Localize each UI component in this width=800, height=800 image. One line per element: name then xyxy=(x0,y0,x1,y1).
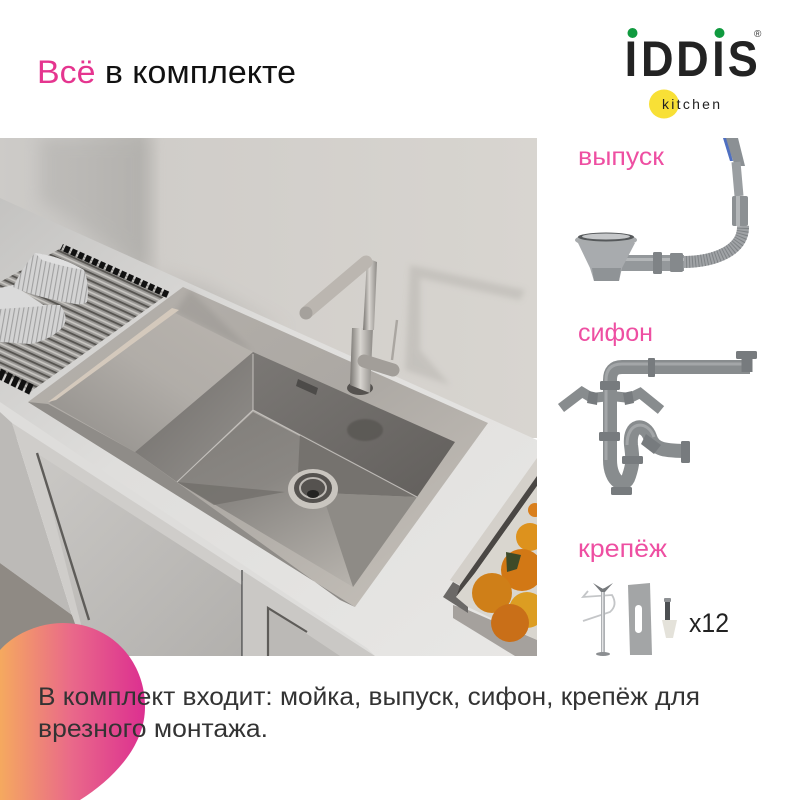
gradient blob xyxy=(0,623,145,800)
faucet reflection on top xyxy=(178,294,238,342)
basin back left wall xyxy=(135,352,253,482)
counter front edge xyxy=(0,402,375,656)
drainboard xyxy=(49,313,253,452)
floor xyxy=(0,563,75,650)
rack ties front xyxy=(0,368,34,395)
persimmons xyxy=(472,503,537,642)
icon: drain outlet xyxy=(575,138,748,281)
sink top xyxy=(28,287,488,607)
photo: kitchen sink xyxy=(0,138,545,656)
title: Всё в комплекте xyxy=(37,54,296,90)
strainer body xyxy=(578,243,635,281)
heading: сифон: сифон xyxy=(578,319,653,347)
basin floor facets xyxy=(298,433,417,497)
kitchen wordmark: kitchen xyxy=(662,96,720,112)
basin back right wall xyxy=(253,352,455,497)
door gap xyxy=(241,570,243,656)
heading: крепёж: крепёж xyxy=(578,535,667,563)
basin crease highlights xyxy=(177,354,417,497)
door inner panel xyxy=(49,475,242,656)
sink front edge shade xyxy=(28,402,355,607)
brand plate xyxy=(296,379,318,395)
nut xyxy=(653,252,662,274)
siphon outlet xyxy=(742,355,752,372)
logo wordmark: IDDIS xyxy=(625,32,758,88)
cabinet xyxy=(0,412,375,656)
logo dots xyxy=(628,28,724,38)
quantity label: x12 xyxy=(689,608,729,638)
door two groove xyxy=(268,608,307,656)
icon: siphon xyxy=(561,351,757,495)
top grate xyxy=(725,138,745,166)
door two xyxy=(243,571,375,656)
door one xyxy=(12,424,242,625)
countertop xyxy=(0,198,537,656)
logo: IDDIS kitchen xyxy=(625,28,762,118)
faucet xyxy=(300,258,397,395)
icon: mounting plate xyxy=(628,583,652,655)
description text: В комплект входит: мойка, выпуск, сифон, крепёж для xyxy=(38,683,700,711)
registered mark: ® xyxy=(754,29,762,40)
siphon collars xyxy=(587,351,757,495)
icon: screw with plug xyxy=(662,598,677,638)
corrugated hose xyxy=(683,226,743,262)
wall shadow xyxy=(42,140,237,304)
drainboard groove xyxy=(48,308,179,402)
door two inner panel xyxy=(268,608,340,656)
basin floor xyxy=(178,412,350,580)
fruit tray xyxy=(443,458,545,656)
horizontal pipe xyxy=(618,255,684,271)
description text: врезного монтажа. xyxy=(38,715,268,743)
bowl top xyxy=(13,253,88,304)
icon: mounting clip xyxy=(583,583,615,656)
drain xyxy=(288,469,338,509)
yellow spot xyxy=(649,90,679,118)
side panel xyxy=(0,412,72,615)
bowl bottom xyxy=(0,285,66,344)
faucet shadow on wall xyxy=(405,265,525,385)
heading: выпуск: выпуск xyxy=(578,143,665,171)
rack ties back xyxy=(60,244,170,298)
flange xyxy=(575,233,637,247)
drying rack xyxy=(0,244,170,395)
overflow xyxy=(347,419,383,441)
collar xyxy=(732,196,748,226)
wall xyxy=(0,138,537,438)
siphon highlights xyxy=(606,364,750,460)
siphon pipes xyxy=(561,367,750,490)
door groove xyxy=(37,453,89,620)
description text xyxy=(38,683,700,743)
overflow pipe xyxy=(736,162,739,196)
